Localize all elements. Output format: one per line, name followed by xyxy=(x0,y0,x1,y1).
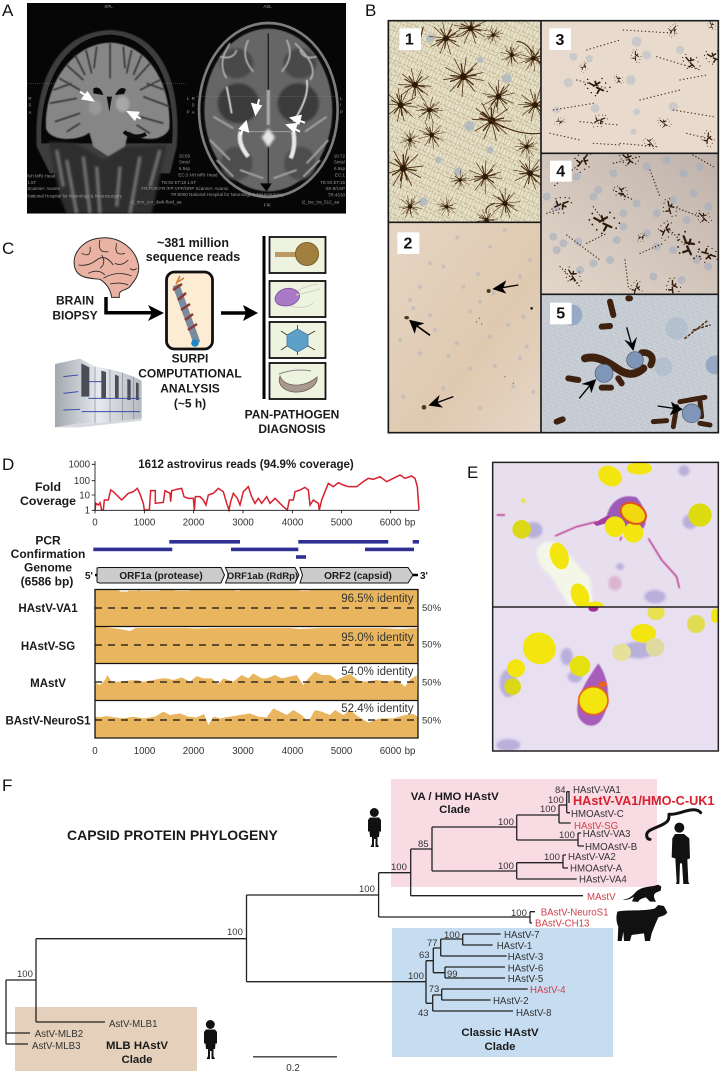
MRI: scanner annotations: R xyxy=(192,96,196,101)
text: read count: sequence reads xyxy=(146,250,240,264)
track: HAstV-VA1 identity: 50% xyxy=(422,603,442,614)
text: taxon labels: AstV-MLB2 xyxy=(35,1029,83,1040)
text: bootstrap values: 84 xyxy=(555,785,566,796)
number label 4 xyxy=(550,161,572,182)
number label 5 xyxy=(550,303,572,324)
text: bootstrap values: 100 xyxy=(498,817,514,828)
text: VA / HMO clade label: VA / HMO HAstV xyxy=(411,791,499,803)
axis label: fold coverage xyxy=(20,480,76,508)
panel A: brain MRI scans xyxy=(27,3,346,214)
MRI: axial section xyxy=(198,22,339,198)
MRI: scanner annotations: P xyxy=(340,109,343,114)
panel letter E: E xyxy=(467,463,478,482)
text: bootstrap values: 100 xyxy=(227,927,243,938)
MRI: scanner annotations: 5mis/ xyxy=(334,159,346,164)
micrograph 3 xyxy=(542,19,724,153)
text: taxon labels: HAstV-3 xyxy=(508,952,543,963)
text: bootstrap values: 100 xyxy=(548,795,564,806)
track: HAstV-VA1 identity: 96.5% identity xyxy=(341,593,414,605)
MRI: scanner annotations: R xyxy=(28,96,32,101)
MRI: scanner annotations: TE:92 ET:18 1.5T xyxy=(161,180,196,185)
MRI: scanner annotations: L xyxy=(340,96,343,101)
text: bootstrap values xyxy=(17,785,575,1019)
label: PCR confirmation: Confirmation xyxy=(11,547,85,561)
MRI: scanner annotations: L xyxy=(187,96,190,101)
text: bootstrap values: 100 xyxy=(511,908,527,919)
text: taxon labels: HAstV-2 xyxy=(493,996,529,1007)
x axis: genome position: 3000 xyxy=(232,746,254,757)
micrograph 3: 3 xyxy=(556,32,565,49)
text: SURPI analysis: ANALYSIS xyxy=(160,382,220,396)
MRI: scanner annotations: S xyxy=(192,103,195,108)
MRI: scanner annotations: 1.5T xyxy=(27,180,37,185)
MRI: scanner annotations: National Hospital for Neurology & Neurosurgery xyxy=(27,193,123,198)
label: genome size: (6586 bp) xyxy=(21,574,73,588)
x axis: genome position: 4000 xyxy=(282,746,304,757)
arrow: analysis to diagnosis xyxy=(221,305,258,321)
MRI: scanner annotations: 6.5sp xyxy=(179,166,190,171)
MRI: scanner annotations: S xyxy=(28,103,31,108)
icon: ferret silhouette xyxy=(623,885,661,902)
number label 2 xyxy=(397,232,419,254)
MRI: scanner annotations: I xyxy=(340,103,341,108)
icon: child silhouette xyxy=(368,808,381,847)
text: taxon labels: HAstV-VA1 xyxy=(573,785,621,796)
genome ORF map: ORF2 (capsid) xyxy=(324,571,392,582)
track: BAstV-NeuroS1 identity: 50% xyxy=(422,716,442,726)
line chart: fold coverage: 4000 xyxy=(282,518,304,528)
axis label: fold coverage: Fold xyxy=(35,480,61,494)
text: SURPI analysis: (~5 h) xyxy=(174,396,206,410)
MRI: scanner annotations: TR:4530 xyxy=(328,193,345,198)
MRI: scanner annotations: 15:59 xyxy=(179,153,190,158)
text: bootstrap values: 100 xyxy=(408,971,424,982)
text: SURPI analysis: COMPUTATIONAL xyxy=(138,366,242,380)
x axis: genome position: 2000 xyxy=(183,746,205,757)
text: taxon labels: HAstV-1 xyxy=(497,941,532,952)
text: SURPI analysis: SURPI xyxy=(172,352,208,366)
icon: cow silhouette xyxy=(616,905,667,941)
x axis: genome position: 0 xyxy=(92,746,98,757)
phylogenetic tree branches xyxy=(6,791,584,1044)
MRI: scanner annotations: EC:1 xyxy=(335,173,345,178)
text: taxon labels: HAstV-5 xyxy=(508,974,543,985)
arrows in micrograph 2 xyxy=(409,281,518,407)
text: bootstrap values: 99 xyxy=(447,969,458,980)
micrograph 2: sparse staining with arrows xyxy=(388,223,541,433)
MRI: scanner annotations: 16:72 xyxy=(334,153,345,158)
label: genome size: Genome xyxy=(24,560,72,574)
text: classic clade label: Clade xyxy=(484,1041,516,1053)
track: BAstV-NeuroS1 identity xyxy=(6,700,442,738)
text: bootstrap values: 43 xyxy=(418,1008,429,1019)
micrograph: upper field xyxy=(493,462,718,611)
text: taxon labels: HAstV-VA4 xyxy=(579,875,627,886)
MRI: scanner annotations: A xyxy=(28,110,31,115)
text: MLB clade label: Clade xyxy=(121,1054,153,1066)
text: highlighted strain: HAstV-VA1/HMO-C-UK1 xyxy=(573,794,714,808)
label: PCR confirmation: PCR xyxy=(35,534,61,548)
track: MAstV identity: 54.0% identity xyxy=(341,666,414,678)
PCR amplicon bars xyxy=(93,540,419,559)
text: MLB clade label xyxy=(106,1040,168,1066)
clade box: VA / HMO xyxy=(391,779,657,887)
text: bootstrap values: 100 xyxy=(498,861,514,872)
track: HAstV-SG identity: HAstV-SG xyxy=(21,641,75,653)
micrograph 4: 4 xyxy=(556,164,565,181)
panel B: immunohistochemistry micrographs xyxy=(376,5,724,433)
clade box: MLB xyxy=(15,1007,197,1071)
MRI: scanner annotations: TR:8000 National Hospital for Neurology & Neurosurgery xyxy=(171,192,285,197)
panel D: coverage and identity plots xyxy=(6,459,442,757)
text: bootstrap values: 100 xyxy=(559,830,575,841)
text: SURPI analysis xyxy=(138,352,242,410)
track: MAstV identity: 50% xyxy=(422,678,442,688)
label: genome size xyxy=(21,560,73,588)
number label 2: 2 xyxy=(404,236,413,253)
genome ORF map: 5' xyxy=(85,571,93,582)
number label 1: 1 xyxy=(405,31,414,48)
text: bootstrap values: 73 xyxy=(429,984,439,995)
micrograph 4 xyxy=(542,150,719,299)
icon: computer servers xyxy=(55,359,142,427)
track: HAstV-SG identity: 95.0% identity xyxy=(341,632,414,644)
text: non-human and highlighted taxa: MAstV xyxy=(587,892,616,903)
text: non-human and highlighted taxa: HAstV-4 xyxy=(530,985,566,996)
MRI: scanner annotations: SPL xyxy=(104,4,113,9)
text: bootstrap values: 100 xyxy=(544,852,560,863)
heading: read coverage: 1612 astrovirus reads (94.9% coverage) xyxy=(138,459,354,471)
icon: brain xyxy=(74,238,139,297)
genome ORF map xyxy=(85,568,428,583)
text: non-human and highlighted taxa: BAstV-CH13 xyxy=(535,919,589,930)
line chart: fold coverage: 0 xyxy=(92,518,98,528)
text: taxon labels: HAstV-VA3 xyxy=(583,829,630,840)
text: MLB clade label: MLB HAstV xyxy=(106,1040,168,1052)
number label 3 xyxy=(549,28,571,50)
line chart: fold coverage: 1000 xyxy=(134,518,156,528)
text: bootstrap values: 100 xyxy=(391,862,407,873)
line chart: fold coverage: 10 xyxy=(79,490,91,502)
track: HAstV-VA1 identity xyxy=(18,590,442,626)
text: taxon labels xyxy=(32,785,637,1052)
panel letter F: F xyxy=(2,776,12,795)
panel letter D: D xyxy=(2,455,14,474)
MRI: scanner annotations: Scanner: Avanto xyxy=(27,186,61,191)
text: classic clade label: Classic HAstV xyxy=(461,1027,539,1039)
panel letter B: B xyxy=(365,1,376,20)
track: MAstV identity: MAstV xyxy=(30,678,66,690)
genome ORF map: ORF1a (protease) xyxy=(119,571,203,582)
line chart: fold coverage: 1000 xyxy=(68,460,91,470)
text: bootstrap values: 77 xyxy=(427,938,438,949)
text: brain biopsy: BRAIN xyxy=(56,294,94,308)
icon: DNA sequencing box xyxy=(166,272,212,349)
text: taxon labels: AstV-MLB3 xyxy=(32,1041,80,1052)
arrows in micrograph 5 xyxy=(579,327,683,415)
MRI: scanner annotations: TE:93 ET:16 xyxy=(320,180,345,185)
arrow: biopsy to analysis xyxy=(106,297,164,321)
x axis: genome position: 5000 xyxy=(331,746,353,757)
x axis: genome position: 1000 xyxy=(134,746,156,757)
text: read count: ~381 million xyxy=(157,236,229,250)
text: VA / HMO clade label: Clade xyxy=(439,804,470,816)
text: bootstrap values: 63 xyxy=(419,950,430,961)
text: bootstrap values: 85 xyxy=(418,839,429,850)
icon: adult silhouette xyxy=(672,823,690,884)
MRI: scanner annotations: t2_tse_tra_512_aa xyxy=(302,199,340,204)
track: HAstV-SG identity: 50% xyxy=(422,640,442,650)
text: VA / HMO clade label xyxy=(411,791,499,816)
MRI: coronal section xyxy=(36,30,177,213)
icon: protozoa tile xyxy=(270,281,326,317)
MRI: scanner annotations: t2_tirm_cor_dark-fluid_aa xyxy=(131,199,182,204)
MRI: scanner annotations: ASL xyxy=(263,4,272,9)
x axis: genome position: bp xyxy=(405,746,415,757)
micrograph 1: astrocytes xyxy=(389,22,540,222)
MRI: scanner annotations: FIK xyxy=(264,203,271,208)
line chart: fold coverage: 5000 xyxy=(331,518,353,528)
text: bootstrap values: 100 xyxy=(444,930,460,941)
track: HAstV-SG identity xyxy=(21,626,442,664)
text: non-human and highlighted taxa: HAstV-SG xyxy=(574,821,618,832)
number label 1 xyxy=(399,28,421,50)
heading: capsid protein phylogeny: CAPSID PROTEIN PHYLOGENY xyxy=(67,827,278,843)
text: taxon labels: HAstV-7 xyxy=(504,930,540,941)
text: bootstrap values: 100 xyxy=(359,884,375,895)
text: taxon labels: HMOAstV-B xyxy=(585,842,637,853)
text: taxon labels: HMOAstV-C xyxy=(571,809,624,820)
text: non-human and highlighted taxa xyxy=(530,821,618,996)
line chart: fold coverage: 6000 xyxy=(380,518,402,528)
panel C: sequencing workflow xyxy=(52,236,339,436)
icon: bacterium tile xyxy=(270,363,326,399)
genome ORF map: 3' xyxy=(420,571,428,582)
icon: bracket xyxy=(647,810,701,839)
axis label: fold coverage: Coverage xyxy=(20,494,76,508)
MRI: scanner annotations: P xyxy=(187,109,190,114)
scale bar xyxy=(253,1056,337,1074)
divider bar xyxy=(262,236,266,399)
line chart: fold coverage: 3000 xyxy=(232,518,254,528)
text: read count xyxy=(146,236,240,264)
text: taxon labels: HAstV-8 xyxy=(516,1008,552,1019)
track: HAstV-VA1 identity: HAstV-VA1 xyxy=(18,603,78,615)
track: MAstV identity xyxy=(30,664,442,700)
text: pan-pathogen diagnosis: DIAGNOSIS xyxy=(258,422,326,436)
MRI: scanner annotations: SE:9/1SP xyxy=(326,186,345,191)
text: taxon labels: HAstV-VA2 xyxy=(568,852,616,863)
x axis: genome position xyxy=(92,746,415,757)
text: pan-pathogen diagnosis xyxy=(245,408,339,436)
panel F: capsid protein phylogeny xyxy=(6,779,714,1074)
track: BAstV-NeuroS1 identity: 52.4% identity xyxy=(341,703,414,715)
icon: fungus tile xyxy=(270,237,326,273)
panel letter A: A xyxy=(2,1,14,20)
icon: virus tile xyxy=(270,322,326,358)
genome ORF map: ORF1ab (RdRp) xyxy=(227,571,298,582)
line chart: fold coverage: bp xyxy=(405,518,415,528)
micrograph: lower field xyxy=(493,605,719,751)
text: bootstrap values: 100 xyxy=(17,969,33,980)
MRI: scanner annotations: 6.5sp xyxy=(334,166,345,171)
text: non-human and highlighted taxa: BAstV-NeuroS1 xyxy=(541,908,609,919)
text: taxon labels: HMOAstV-A xyxy=(570,864,623,875)
text: taxon labels: AstV-MLB1 xyxy=(109,1019,157,1030)
MRI: scanner annotations xyxy=(27,4,346,208)
line chart: fold coverage: 2000 xyxy=(183,518,205,528)
MRI: scanner annotations: 5mis/ xyxy=(179,159,191,164)
text: pan-pathogen diagnosis: PAN-PATHOGEN xyxy=(245,408,339,422)
micrograph 5: 5 xyxy=(556,306,565,323)
scale bar: 0.2 xyxy=(286,1063,300,1074)
MRI: white arrows xyxy=(80,92,305,135)
line chart: fold coverage: 1 xyxy=(85,506,90,516)
MRI: scanner annotations: EC:3 NH MRI Head xyxy=(178,173,218,178)
icon: child silhouette xyxy=(204,1020,217,1059)
clade box: classic xyxy=(392,928,613,1057)
label: PCR confirmation xyxy=(11,534,85,561)
text: brain biopsy xyxy=(52,294,98,322)
MRI: scanner annotations: FR:FOR:FR:/FP:VFP/ORP Scanner: Avanto xyxy=(141,186,229,191)
text: taxon labels: HAstV-6 xyxy=(508,964,543,975)
MRI: scanner annotations: NH MRI Head xyxy=(27,173,56,178)
x axis: genome position: 6000 xyxy=(380,746,402,757)
line chart: fold coverage xyxy=(68,460,419,528)
line chart: fold coverage: 100 xyxy=(74,476,91,487)
MRI: scanner annotations: A xyxy=(192,110,195,115)
micrograph 5 xyxy=(542,295,724,433)
panel letter C: C xyxy=(2,239,14,258)
text: bootstrap values: 100 xyxy=(540,804,556,815)
panel E: in situ hybridization micrographs xyxy=(493,462,719,751)
text: brain biopsy: BIOPSY xyxy=(52,308,98,322)
text: classic clade label xyxy=(461,1027,539,1053)
track: BAstV-NeuroS1 identity: BAstV-NeuroS1 xyxy=(6,716,91,728)
